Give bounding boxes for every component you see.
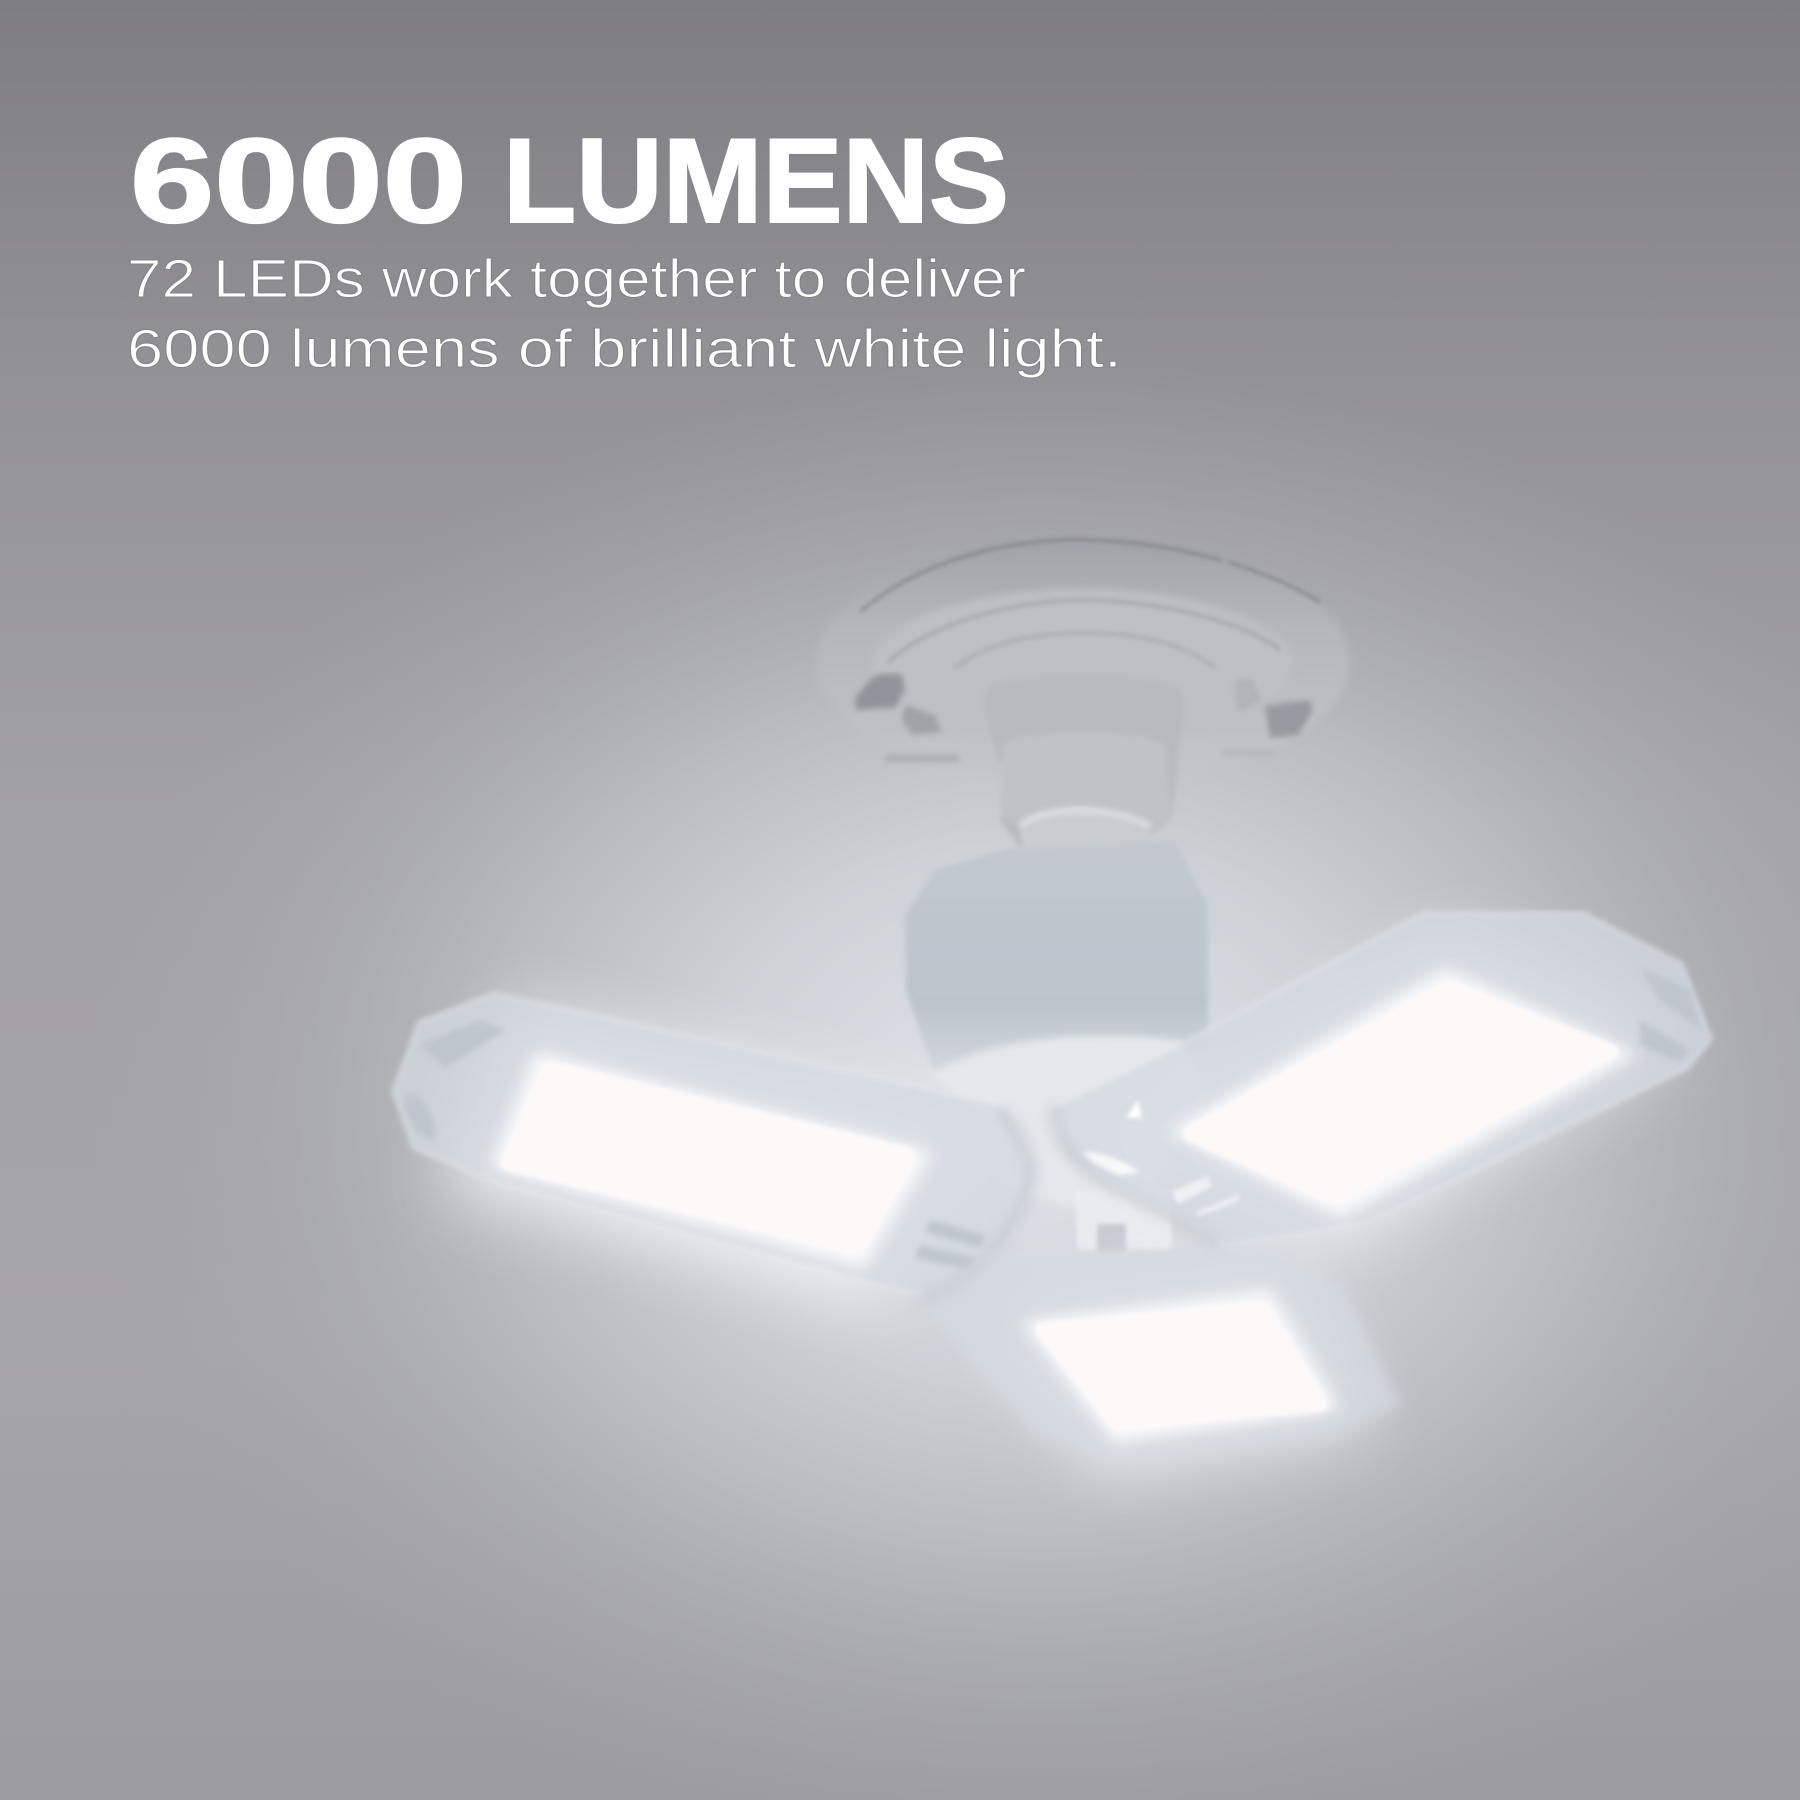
text block: description: 72 LEDs work together to deliver (127, 249, 1026, 309)
title: LUMENS (503, 114, 1009, 248)
wing slots (1081, 1100, 1240, 1216)
right LED panel (1182, 983, 1619, 1204)
icon: left mounting screw (855, 674, 960, 762)
panel: right light wing (1053, 913, 1711, 1246)
title: 6000 (130, 114, 467, 248)
text block: description: 6000 lumens of brilliant white light. (127, 319, 1122, 379)
bottom panel light halo (1022, 1290, 1340, 1442)
lamp: soft glow behind panels (440, 940, 1680, 1470)
wing vents (404, 1020, 985, 1270)
lamp: ceiling mount base plate (816, 538, 1350, 786)
lamp: central hub (930, 1036, 1210, 1252)
icon: right mounting screw (1222, 678, 1312, 756)
panel: bottom light wing (918, 1246, 1401, 1464)
left panel light halo (490, 1052, 932, 1268)
lamp: main body (905, 842, 1208, 1090)
bottom LED panel (1036, 1302, 1328, 1430)
right panel light halo (1168, 968, 1638, 1218)
left LED panel (501, 1062, 916, 1254)
wing edge shadow near hub (920, 1105, 1220, 1300)
text block: description (127, 249, 1122, 379)
panel: left light wing (393, 993, 1037, 1297)
wing vents (1640, 968, 1702, 1062)
title (130, 114, 1009, 248)
lamp: socket neck (985, 675, 1183, 850)
